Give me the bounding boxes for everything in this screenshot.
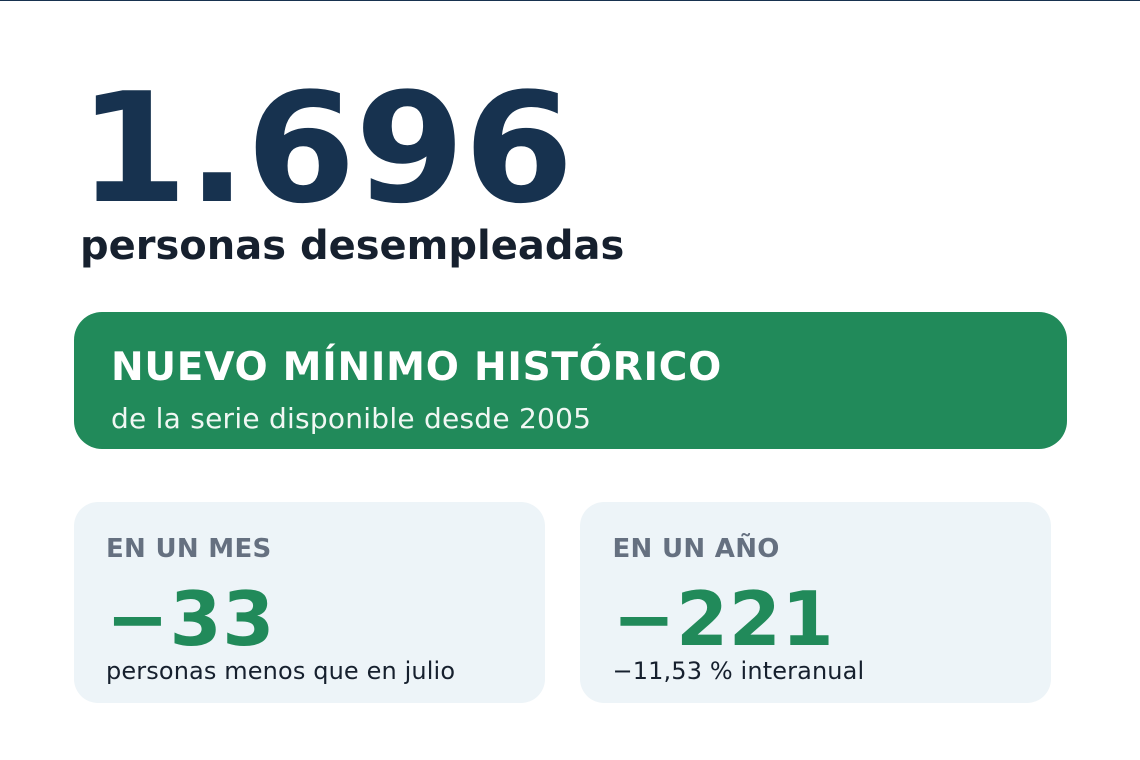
banner subtext: de la serie disponible desde 2005: [111, 402, 591, 435]
panel: en un mes: [74, 502, 545, 703]
top rule: [0, 0, 1140, 1]
banner heading: NUEVO MÍNIMO HISTÓRICO: [111, 345, 722, 390]
panel note: personas menos que en julio: [106, 657, 455, 685]
headline figure: 1.696: [78, 60, 572, 237]
panel: en un año: [580, 502, 1051, 703]
panel figure: −33: [106, 575, 275, 663]
headline caption: personas desempleadas: [80, 223, 624, 269]
banner: nuevo mínimo histórico: [74, 312, 1067, 449]
panel note: −11,53 % interanual: [612, 657, 864, 685]
panel figure: −221: [612, 575, 834, 663]
panel label: EN UN MES: [106, 534, 272, 564]
panel label: EN UN AÑO: [612, 534, 780, 564]
